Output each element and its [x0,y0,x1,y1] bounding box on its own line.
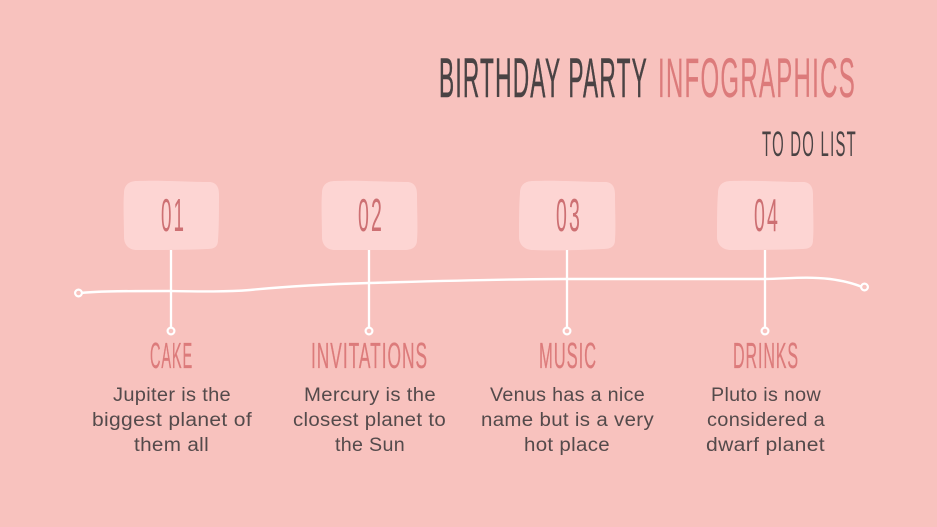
description: drinks: considered a [707,410,825,431]
step 03: music: 03 [556,189,582,241]
connector 01 [168,250,174,334]
timeline line [75,278,868,296]
description: music: Venus has a nice [490,385,645,406]
connector 03 [564,250,570,334]
description: music [481,385,654,456]
step 04: drinks: DRINKS [733,335,799,376]
step 02: invitations: INVITATIONS [311,335,428,376]
number box 03 [519,181,615,250]
description: invitations [293,385,446,456]
description: invitations: Mercury is the [304,385,436,406]
description: drinks: Pluto is now [711,385,821,406]
description: cake: Jupiter is the [113,385,231,406]
description: music: name but is a very [481,410,654,431]
number box 02 [322,181,417,250]
step 01: cake: 01 [161,189,186,241]
step 01: cake: CAKE [150,335,193,376]
description: drinks: dwarf planet [706,435,825,456]
number box 01 [124,181,219,250]
step 04: drinks [706,181,825,456]
step 03: music [481,181,654,456]
description: invitations: the Sun [335,435,405,456]
connector 02 [366,250,372,334]
description: cake: them all [134,435,209,456]
connector 04 [762,250,768,334]
step 02: invitations: 02 [358,189,384,241]
description: cake [92,385,252,456]
step 04: drinks: 04 [754,189,780,241]
number box 04 [717,181,813,250]
step 02: invitations [293,181,446,456]
description: music: hot place [524,435,610,456]
description: cake: biggest planet of [92,410,252,431]
description: invitations: closest planet to [293,410,446,431]
step 01: cake [92,181,252,456]
description: drinks [706,385,825,456]
step 03: music: MUSIC [539,335,597,376]
